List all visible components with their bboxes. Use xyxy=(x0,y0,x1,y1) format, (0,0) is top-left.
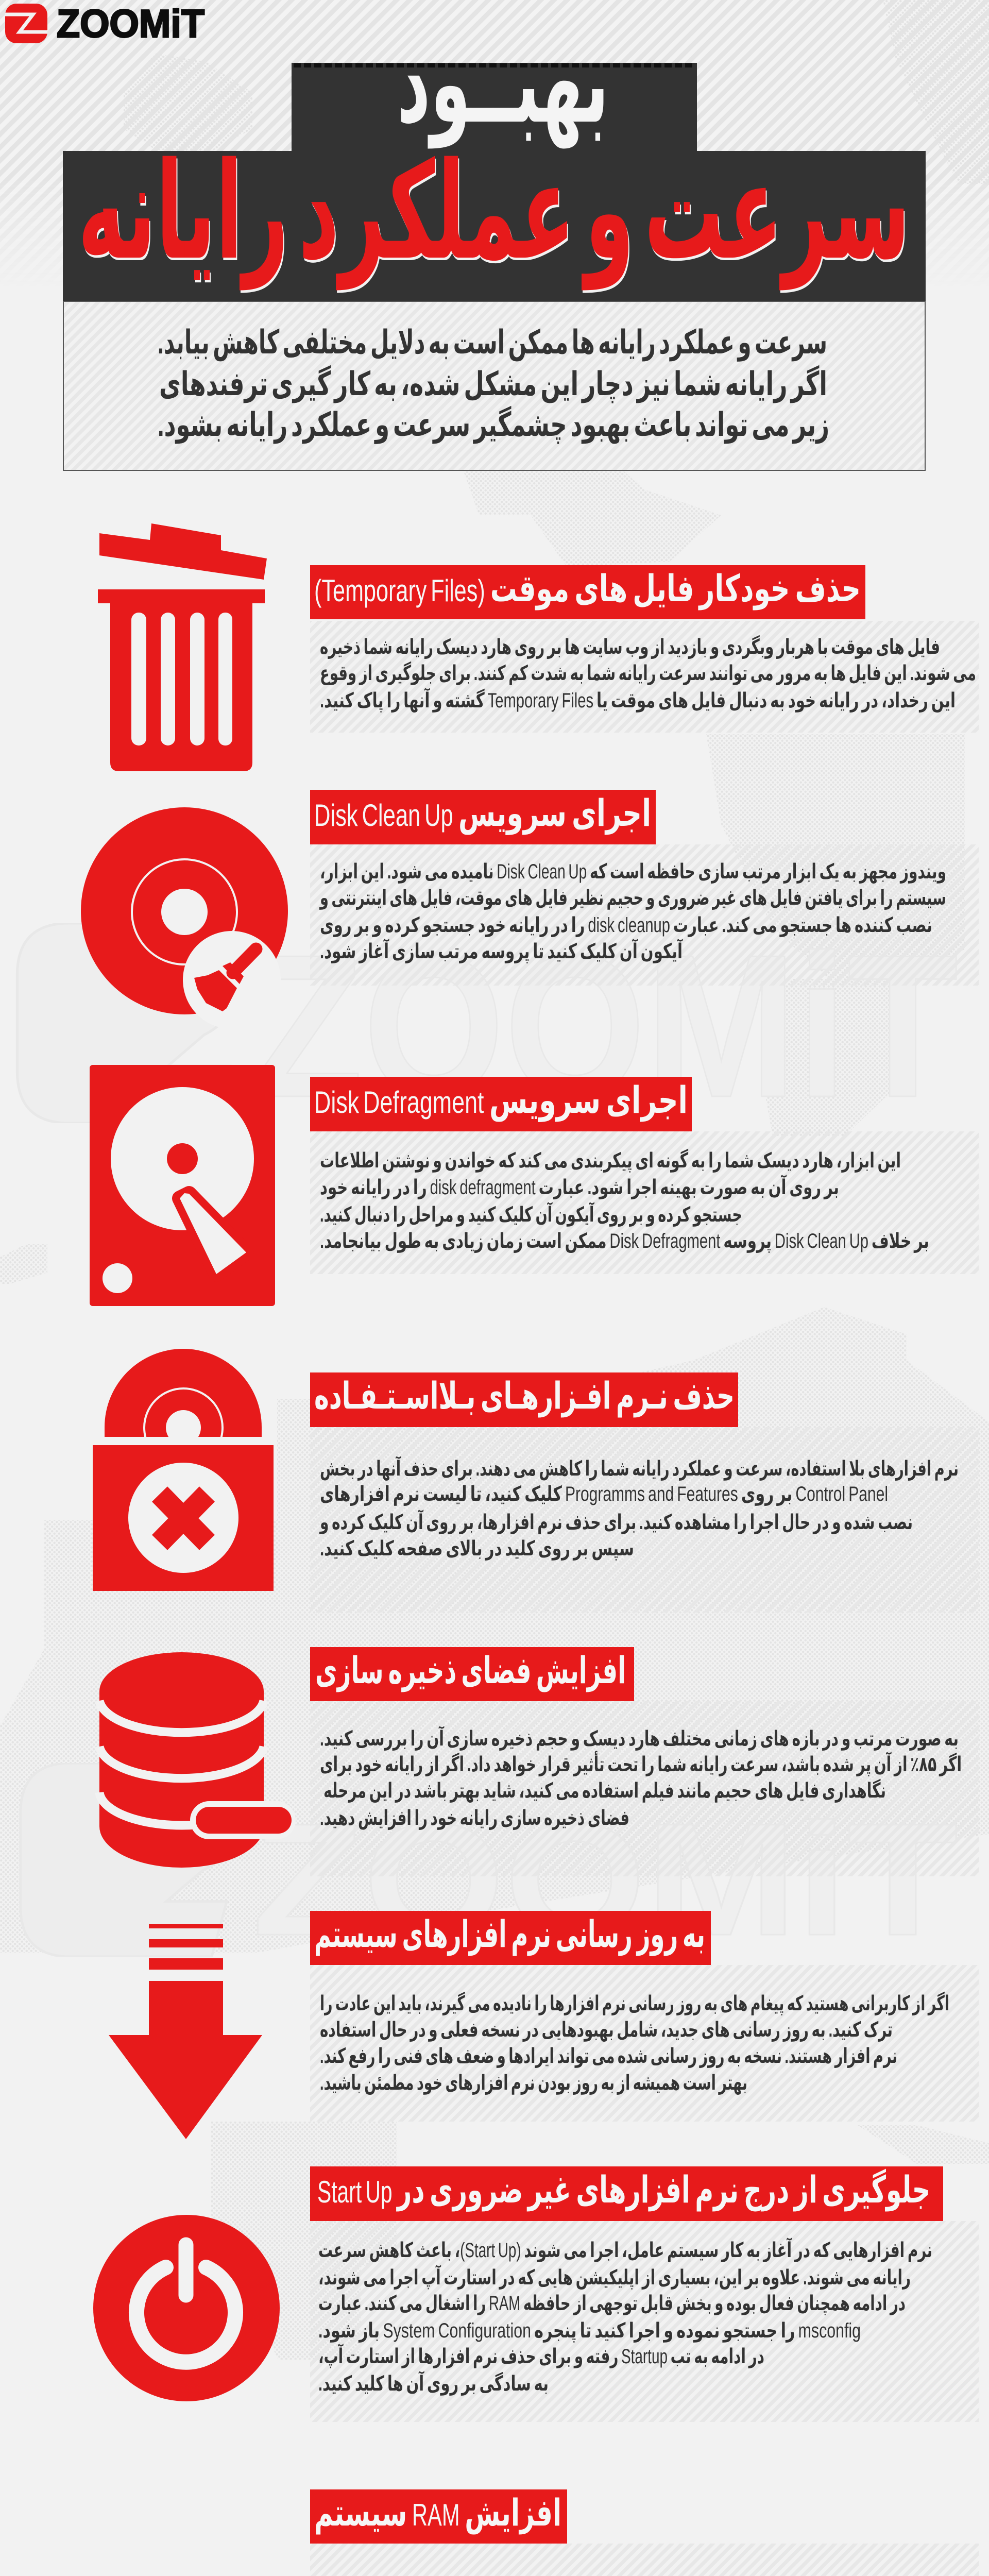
section 8: ram xyxy=(310,2489,979,2576)
heading 4 xyxy=(310,1372,738,1427)
title block xyxy=(63,21,926,301)
icon: padlock with cross xyxy=(93,1349,274,1591)
panel 2 text xyxy=(310,844,979,986)
heading 8 xyxy=(310,2489,567,2544)
panel 8 text xyxy=(310,2544,979,2576)
icon: hard disk xyxy=(90,1065,275,1306)
section 6: update software xyxy=(310,1911,979,2122)
logo wordmark: ZOOMiT xyxy=(57,2,204,46)
panel 7 text xyxy=(310,2221,979,2422)
panel 4 text xyxy=(310,1427,979,1613)
heading 8: افزایش RAM سیستم xyxy=(314,2493,561,2535)
icon: download arrow xyxy=(109,1924,262,2139)
background: diagonal stripes xyxy=(0,0,989,222)
heading 2: اجرای سرویس Disk Clean Up xyxy=(314,793,651,835)
background: large zoomit watermark lower: ZOOMiT xyxy=(252,1790,958,1969)
panel 3 text: بر روی آن به صورت بهینه اجرا شود. عبارت disk defragment را در رایانه خود xyxy=(320,1174,839,1199)
panel 6 text xyxy=(310,1965,979,2122)
panel 7 text: msconfig را جستجو نموده و اجرا کنید تا پنجره System Configuration باز شود. xyxy=(318,2319,861,2343)
panel 3 text: بر خلاف Disk Clean Up پروسه Disk Defragment ممکن است زمان زیادی به طول بیانجامد. xyxy=(320,1230,929,1253)
section 7: startup xyxy=(310,2166,979,2422)
icon: disk with broom xyxy=(81,807,288,1029)
heading 1 xyxy=(310,565,865,619)
icon: zoomit z mark xyxy=(5,4,47,43)
panel 1 text xyxy=(310,621,979,733)
section 1: temporary files xyxy=(310,565,979,733)
intro text xyxy=(158,324,829,444)
heading 5 xyxy=(310,1647,634,1701)
panel: introduction xyxy=(63,301,925,470)
panel 7 text: به سادگی بر روی آن ها کلید کنید. xyxy=(318,2370,549,2396)
section 4: remove unused software xyxy=(310,1372,979,1613)
icon: trash can xyxy=(98,523,267,771)
panel 2 text: آیکون آن کلیک کنید تا پروسه مرتب سازی آغاز شود. xyxy=(320,938,683,963)
panel 3 text: جستجو کرده و بر روی آیکون آن کلیک کنید و مراحل را دنبال کنید. xyxy=(320,1201,742,1227)
heading 4: حذف نـرم افـزارهـای بـلااسـتـفـاده xyxy=(314,1376,735,1418)
icon: power button xyxy=(93,2215,280,2401)
section 3: disk defragment xyxy=(310,1077,979,1274)
logo: zoomit xyxy=(5,2,204,46)
heading 6: به روز رسانی نرم افزارهای سیستم xyxy=(314,1914,705,1956)
panel 4 text: سپس بر روی کلید در بالای صفحه کلیک کنید. xyxy=(320,1537,634,1561)
panel 5 text: فضای ذخیره سازی رایانه خود را افزایش دهید. xyxy=(320,1807,629,1830)
panel 4 text: Control Panel بر روی Programms and Features کلیک کنید، تا لیست نرم افزارهای xyxy=(320,1483,888,1506)
panel 5 text xyxy=(310,1701,979,1876)
panel 7 text: در ادامه به تب Startup رفته و برای حذف نرم افزارها از استارت آپ، xyxy=(318,2343,764,2368)
heading 1: حذف خودکار فایل های موقت (Temporary Files) xyxy=(314,568,861,611)
heading 3 xyxy=(310,1077,692,1131)
heading 5: افزایش فضای ذخیره سازی xyxy=(315,1650,626,1692)
title: line one: بهبــود xyxy=(397,21,609,149)
background: large zoomit watermark lower xyxy=(21,1763,958,1969)
heading 2 xyxy=(310,790,656,844)
broom xyxy=(194,949,256,1011)
heading 3: اجرای سرویس Disk Defragment xyxy=(314,1080,688,1122)
icon: database xyxy=(99,1652,296,1868)
heading 6 xyxy=(310,1911,711,1965)
panel 3 text xyxy=(310,1131,979,1274)
section 5: increase storage xyxy=(310,1647,979,1876)
panel 6 text: بهتر است همیشه از به روز بودن نرم افزارهای خود مطمئن باشید. xyxy=(320,2072,747,2095)
section 2: disk clean up xyxy=(310,790,979,986)
